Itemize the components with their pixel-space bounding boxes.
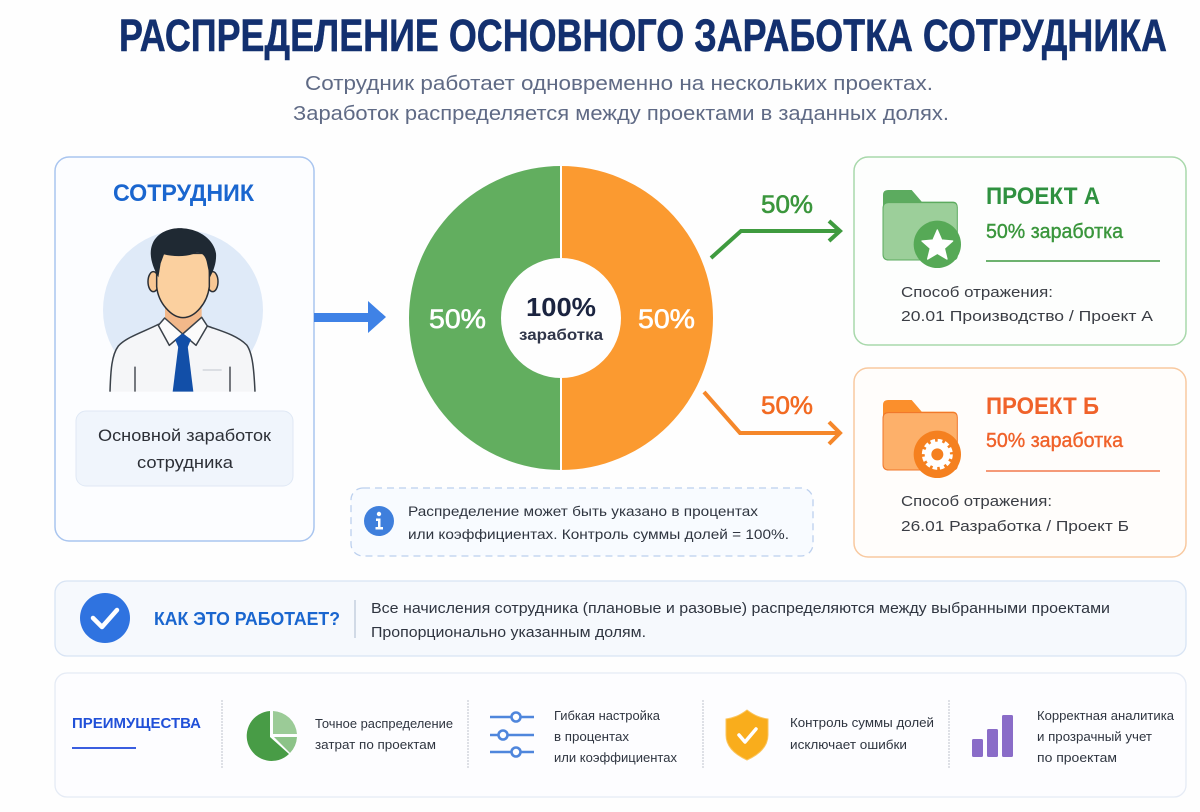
how it works text <box>371 600 1110 641</box>
how it works text: Все начисления сотрудника (плановые и разовые) распределяются между выбранными проектами <box>371 600 1110 617</box>
icon: bars <box>972 715 1013 757</box>
icon: pie chart <box>247 711 297 761</box>
advantage 3: исключает ошибки <box>790 737 907 752</box>
icon: shield <box>726 710 768 760</box>
how it works heading: КАК ЭТО РАБОТАЕТ? <box>154 609 340 629</box>
icon: orange folder with gear <box>883 400 961 478</box>
project A share: 50% заработка <box>986 221 1124 243</box>
project A posting <box>901 284 1153 325</box>
advantage 4: по проектам <box>1037 750 1117 765</box>
slice: green 50% <box>409 166 561 470</box>
advantage 1: Точное распределение <box>315 716 453 731</box>
arrow: to project B <box>704 392 840 444</box>
advantage 4: Корректная аналитика <box>1037 708 1175 723</box>
label: left 50%: 50% <box>429 304 486 334</box>
project A posting: Способ отражения: <box>901 284 1053 301</box>
label: right 50%: 50% <box>638 304 695 334</box>
icon: green folder with star <box>883 190 961 268</box>
label: base earnings: Основной заработок <box>98 426 272 445</box>
advantages heading <box>72 715 201 748</box>
project B posting: 26.01 Разработка / Проект Б <box>901 518 1129 535</box>
project A title: ПРОЕКТ А <box>986 183 1100 210</box>
advantage 4 <box>972 708 1175 765</box>
note text: Распределение может быть указано в процентах <box>408 503 758 519</box>
label: base earnings: сотрудника <box>137 453 234 472</box>
panel: employee <box>55 157 314 541</box>
panel: advantages <box>55 673 1186 797</box>
callout: info note <box>351 488 813 556</box>
note text <box>408 503 789 542</box>
how it works text: Пропорционально указанным долям. <box>371 624 646 641</box>
icon: check <box>80 593 130 643</box>
panel: how it works <box>55 581 1186 656</box>
arrow: to project A <box>711 191 840 258</box>
subtitle: Сотрудник работает одновременно на нескольких проектах. <box>305 72 933 95</box>
icon: sliders <box>490 712 534 756</box>
project A posting: 20.01 Производство / Проект А <box>901 308 1153 325</box>
subtitle <box>293 72 949 125</box>
project B posting <box>901 493 1129 535</box>
icon: employee portrait <box>103 228 263 392</box>
arrow: employee to chart <box>314 301 386 333</box>
arrow: to project A: 50% <box>761 191 813 219</box>
panel: project B <box>854 368 1186 557</box>
slice: orange 50% <box>561 166 713 470</box>
advantage 2: или коэффициентах <box>554 750 677 765</box>
advantages heading: ПРЕИМУЩЕСТВА <box>72 715 201 732</box>
project B share: 50% заработка <box>986 430 1124 452</box>
advantage 2 <box>490 708 677 765</box>
panel: project A <box>854 157 1186 345</box>
heading: employee: СОТРУДНИК <box>113 180 254 207</box>
project B posting: Способ отражения: <box>901 493 1052 510</box>
donut chart <box>409 166 713 470</box>
subtitle: Заработок распределяется между проектами в заданных долях. <box>293 102 949 125</box>
advantage 1 <box>247 711 453 761</box>
center label: 100% <box>526 292 596 322</box>
advantage 2: Гибкая настройка <box>554 708 661 723</box>
arrow: to project B: 50% <box>761 392 813 420</box>
advantage 1: затрат по проектам <box>315 737 436 752</box>
advantage 3: Контроль суммы долей <box>790 715 934 730</box>
advantage 4: и прозрачный учет <box>1037 729 1152 744</box>
icon: info <box>364 506 394 536</box>
center label <box>519 292 603 344</box>
center label: заработка <box>519 327 603 344</box>
label: base earnings <box>76 411 293 486</box>
advantage 2: в процентах <box>554 729 630 744</box>
project B title: ПРОЕКТ Б <box>986 393 1099 420</box>
advantage 3 <box>726 710 934 760</box>
note text: или коэффициентах. Контроль суммы долей = 100%. <box>408 526 789 542</box>
